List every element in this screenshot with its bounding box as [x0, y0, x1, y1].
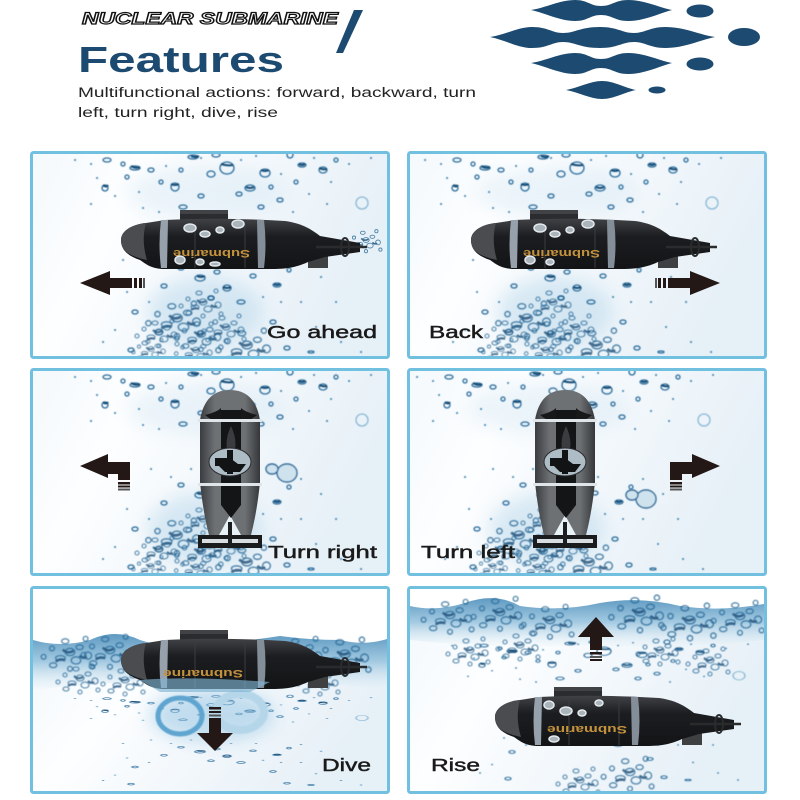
- title: features: Features: [78, 39, 284, 80]
- arrow: backward: [655, 271, 720, 295]
- submarine side view: Submarine: [173, 247, 250, 259]
- panel: turn left: [408, 369, 766, 583]
- submarine top view: [198, 390, 262, 548]
- arrow: turn left: [670, 454, 720, 480]
- arrow: forward: [80, 271, 145, 295]
- panel border: [32, 152, 388, 358]
- panel: go ahead: [32, 152, 388, 366]
- label: turn right: Turn right: [268, 542, 377, 562]
- description text: left, turn right, dive, rise: [78, 105, 278, 120]
- label: go ahead: Go ahead: [267, 322, 377, 342]
- submarine side view: [495, 687, 741, 746]
- panel border: [32, 588, 388, 792]
- bubbles: turn right: [73, 371, 373, 573]
- arrow stripes: [670, 482, 682, 490]
- submarine side view: Submarine: [523, 247, 600, 259]
- label: back: Back: [429, 322, 483, 342]
- label: dive: Dive: [322, 755, 371, 775]
- panel: back: [408, 152, 766, 366]
- icon: water wave logo: [490, 0, 760, 99]
- panel: dive: [32, 588, 388, 792]
- bubbles: back: [424, 154, 723, 356]
- panel: rise: [408, 588, 766, 796]
- arrow: dive: [197, 707, 233, 751]
- panel border: [408, 152, 766, 358]
- brand label: nuclear submarine: NUCLEAR SUBMARINE: [82, 9, 339, 28]
- bubbles: turn left: [416, 371, 715, 573]
- slash accent: [336, 10, 363, 53]
- description text: Multifunctional actions: forward, backward, turn: [78, 85, 476, 100]
- description text: [78, 85, 476, 120]
- label: turn left: Turn left: [421, 542, 515, 562]
- submarine side view: [471, 210, 717, 269]
- submarine side view: [121, 630, 367, 692]
- panel border: [32, 370, 388, 574]
- submarine top view: [533, 390, 597, 548]
- water and bubbles: rise: [410, 594, 764, 791]
- panel: turn right: [32, 369, 388, 583]
- submarine side view: Submarine: [163, 667, 243, 679]
- submarine side view: [121, 210, 367, 269]
- bubbles: go ahead: [73, 154, 382, 356]
- submarine side view: Submarine: [547, 723, 627, 735]
- label: rise: Rise: [431, 755, 480, 775]
- panel border: [408, 588, 766, 792]
- arrow: rise: [578, 617, 614, 661]
- header: [78, 9, 476, 120]
- water and bubbles: dive: [33, 633, 387, 791]
- arrow: turn right: [80, 454, 130, 480]
- panel border: [408, 370, 766, 574]
- arrow stripes: [118, 482, 130, 490]
